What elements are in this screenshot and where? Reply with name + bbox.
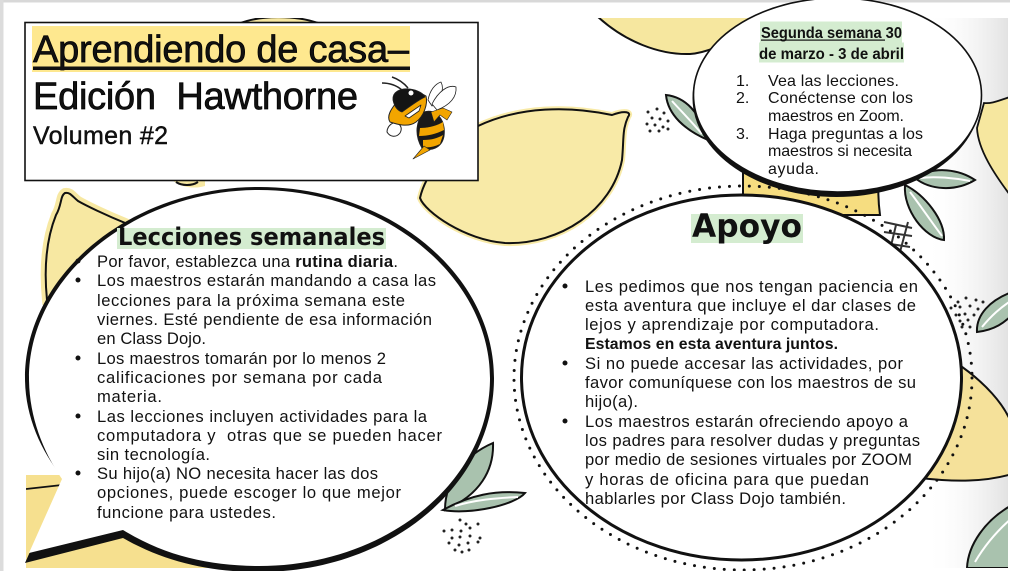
title line 1: Aprendiendo de casa– — [33, 29, 410, 71]
support bullets: lejos y aprendizaje por computadora. — [585, 315, 879, 334]
dots: right — [951, 298, 983, 327]
numbered steps: maestros si necesita — [768, 143, 912, 160]
numbered steps: 1. — [736, 73, 749, 90]
numbered steps: Conéctense con los — [768, 90, 913, 107]
lesson bullets: sin tecnología. — [97, 445, 210, 464]
lesson bullets: Las lecciones incluyen actividades para la — [97, 407, 428, 426]
panel: Lecciones semanales speech bubble — [25, 187, 494, 571]
hatch mark — [884, 222, 912, 252]
support bullets: favor comuníquese con los maestros de su — [585, 373, 916, 392]
solid ellipse — [522, 195, 962, 560]
support bullets: Les pedimos que nos tengan paciencia en — [585, 277, 918, 296]
schedule heading — [759, 22, 904, 63]
lesson bullets: computadora y otras que se pueden hacer — [97, 426, 442, 445]
numbered steps: Haga preguntas a los — [768, 126, 923, 143]
numbered steps: Vea las lecciones. — [768, 73, 899, 90]
lesson bullets: Los maestros estarán mandando a casa las — [97, 271, 436, 290]
support bullets: Estamos en esta aventura juntos. — [585, 336, 838, 353]
support bullets: y horas de oficina para que puedan — [585, 470, 869, 489]
numbered steps — [736, 73, 923, 178]
ellipse shape — [692, 0, 982, 197]
panel: title box — [25, 22, 478, 180]
lesson bullets: calificaciones por semana por cada — [97, 368, 383, 387]
dots: upper centre — [647, 109, 668, 131]
bubble shape — [25, 187, 494, 571]
lemon: right lower — [926, 366, 1008, 482]
numbered steps: 3. — [736, 126, 749, 143]
lemon: left — [46, 193, 130, 300]
heading: Lecciones semanales: Lecciones semanales — [118, 223, 385, 251]
support bullets — [565, 277, 920, 508]
lesson bullets: viernes. Esté pendiente de esa información — [97, 310, 432, 329]
lemon: middle centre — [420, 109, 629, 243]
lesson bullets: Por favor, establezca una rutina diaria. — [97, 252, 398, 271]
title underline — [33, 66, 410, 70]
volume label: Volumen #2 — [33, 122, 168, 150]
lemon: behind Apoyo — [743, 170, 880, 215]
dots: lower centre — [444, 520, 480, 552]
lemon: top centre — [597, 14, 750, 54]
lemon: right upper — [977, 97, 1010, 195]
leaves: right — [977, 292, 1010, 332]
lesson bullets: en Class Dojo. — [97, 329, 206, 348]
lesson bullets: funcione para ustedes. — [97, 503, 276, 522]
lemon: top behind title — [172, 17, 318, 188]
support bullets: Si no puede accesar las actividades, por — [585, 354, 903, 373]
lesson bullets: materia. — [97, 387, 162, 406]
title line 2: Edición Hawthorne — [33, 76, 358, 118]
panel: Apoyo — [514, 186, 972, 570]
lesson bullets: lecciones para la próxima semana este — [97, 291, 405, 310]
schedule heading: Segunda semana 30 — [761, 25, 902, 42]
support bullets: hijo(a). — [585, 392, 638, 411]
support bullets: los padres para resolver dudas y preguntas — [585, 431, 920, 450]
panel: weekly schedule ellipse — [692, 0, 982, 197]
leaves: upper right — [905, 170, 975, 240]
numbered steps: 2. — [736, 90, 749, 107]
heading: Apoyo: Apoyo — [692, 207, 802, 245]
lemon: bottom left — [26, 475, 208, 568]
leaves: upper centre — [666, 95, 708, 140]
numbered steps: maestros en Zoom. — [768, 108, 904, 125]
leaves: bottom right — [967, 505, 1010, 568]
title highlight — [32, 26, 410, 72]
support bullets: Los maestros estarán ofreciendo apoyo a — [585, 412, 909, 431]
lesson bullets: Los maestros tomarán por lo menos 2 — [97, 349, 386, 368]
numbered steps: ayuda. — [768, 161, 819, 178]
support bullets: por medio de sesiones virtuales por ZOOM — [585, 450, 912, 469]
schedule heading: de marzo - 3 de abril — [759, 46, 904, 63]
lesson bullets: Su hijo(a) NO necesita hacer las dos — [97, 464, 378, 483]
icon: hornet mascot — [382, 77, 456, 159]
lesson bullets: opciones, puede escoger lo que mejor — [97, 483, 401, 502]
support bullets: esta aventura que incluye el dar clases de — [585, 296, 916, 315]
support bullets: hablarles por Class Dojo también. — [585, 489, 846, 508]
leaves: lower centre-left — [443, 443, 525, 511]
lesson bullets — [78, 252, 442, 522]
dotted ring — [514, 186, 972, 570]
